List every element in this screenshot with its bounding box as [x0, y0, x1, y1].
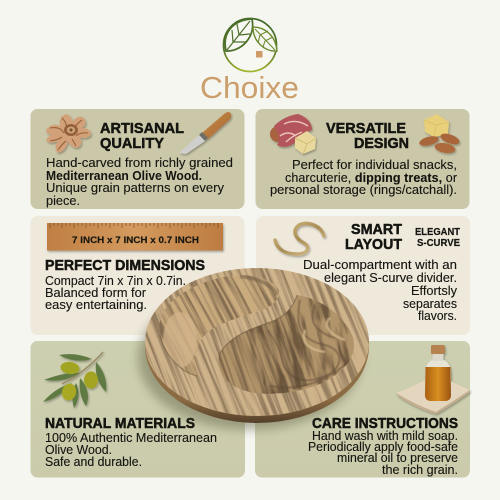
text block	[303, 258, 458, 323]
panel: artisanal quality	[30, 109, 244, 209]
compartment shading	[160, 295, 297, 376]
text block: charcuterie, dipping treats, or	[285, 171, 457, 185]
icon: olive branch	[43, 352, 106, 408]
text block	[45, 274, 186, 312]
label: elegant s-curve: S-CURVE	[417, 238, 460, 249]
bowl shadow	[138, 286, 362, 430]
text block: easy entertaining.	[45, 298, 147, 312]
text block: Hand wash with mild soap.	[312, 429, 458, 443]
text block: Olive Wood.	[45, 443, 112, 457]
icon: carving chisel	[179, 112, 231, 154]
icon: cheese and almonds	[418, 114, 461, 155]
logo	[224, 18, 277, 72]
text block: 100% Authentic Mediterranean	[45, 431, 217, 445]
text block: personal storage (rings/catchall).	[270, 183, 457, 197]
panel: smart layout	[256, 216, 470, 335]
icon: oil bottle on cloth	[396, 345, 470, 414]
text block: elegant S-curve divider.	[324, 271, 457, 285]
heading: QUALITY	[100, 135, 164, 152]
text block: Hand-carved from richly grained	[46, 156, 233, 170]
text block: the rich grain.	[382, 463, 458, 477]
text block	[308, 429, 458, 477]
icon: wood shavings	[46, 114, 91, 153]
text block: piece.	[46, 194, 80, 208]
heading: PERFECT DIMENSIONS	[45, 258, 205, 274]
text block: Balanced form for	[45, 286, 146, 300]
label: elegant s-curve	[415, 227, 460, 249]
text block: Perfect for individual snacks,	[292, 158, 457, 172]
heading: SMART	[351, 221, 402, 238]
icon: wooden ruler	[47, 223, 223, 250]
panel: versatile design	[256, 109, 470, 209]
heading: CARE INSTRUCTIONS	[312, 416, 458, 432]
heading	[326, 120, 409, 152]
icon: cured meat and cheese	[270, 114, 316, 154]
text block: Periodically apply food-safe	[308, 440, 458, 454]
rim grain	[145, 268, 369, 416]
label: elegant s-curve: ELEGANT	[415, 227, 460, 238]
panel: care instructions	[255, 341, 470, 478]
text block: mineral oil to preserve	[337, 451, 458, 465]
heading	[100, 120, 184, 152]
heading: ARTISANAL	[100, 120, 184, 137]
heading: DESIGN	[354, 135, 409, 152]
olive wood bowl	[134, 268, 369, 436]
bowl side	[145, 269, 369, 423]
text block	[46, 156, 233, 208]
text block: flavors.	[418, 309, 457, 323]
bowl rim	[145, 268, 369, 416]
heading: NATURAL MATERIALS	[45, 416, 195, 432]
left compartment	[160, 275, 280, 376]
right compartment	[218, 295, 354, 394]
text block: Unique grain patterns on every	[46, 181, 225, 195]
text block: Safe and durable.	[45, 455, 142, 469]
text block	[270, 158, 457, 197]
text block: Mediterranean Olive Wood.	[46, 169, 202, 183]
icon: gold S-curve	[275, 223, 324, 254]
text block: Dual-compartment with an	[303, 258, 457, 272]
heading: VERSATILE	[326, 120, 406, 137]
text block: Effortsly	[411, 284, 458, 298]
heading	[345, 221, 402, 253]
text block	[45, 431, 217, 469]
heading: LAYOUT	[345, 236, 402, 253]
icon: wooden ruler: 7 INCH x 7 INCH x 0.7 INCH	[72, 235, 199, 246]
panel: perfect dimensions	[30, 216, 244, 335]
text block: separates	[403, 297, 457, 311]
panel: natural materials	[30, 341, 245, 478]
brand name: Choixe	[200, 70, 299, 105]
text block: Compact 7in x 7in x 0.7in.	[45, 274, 186, 288]
